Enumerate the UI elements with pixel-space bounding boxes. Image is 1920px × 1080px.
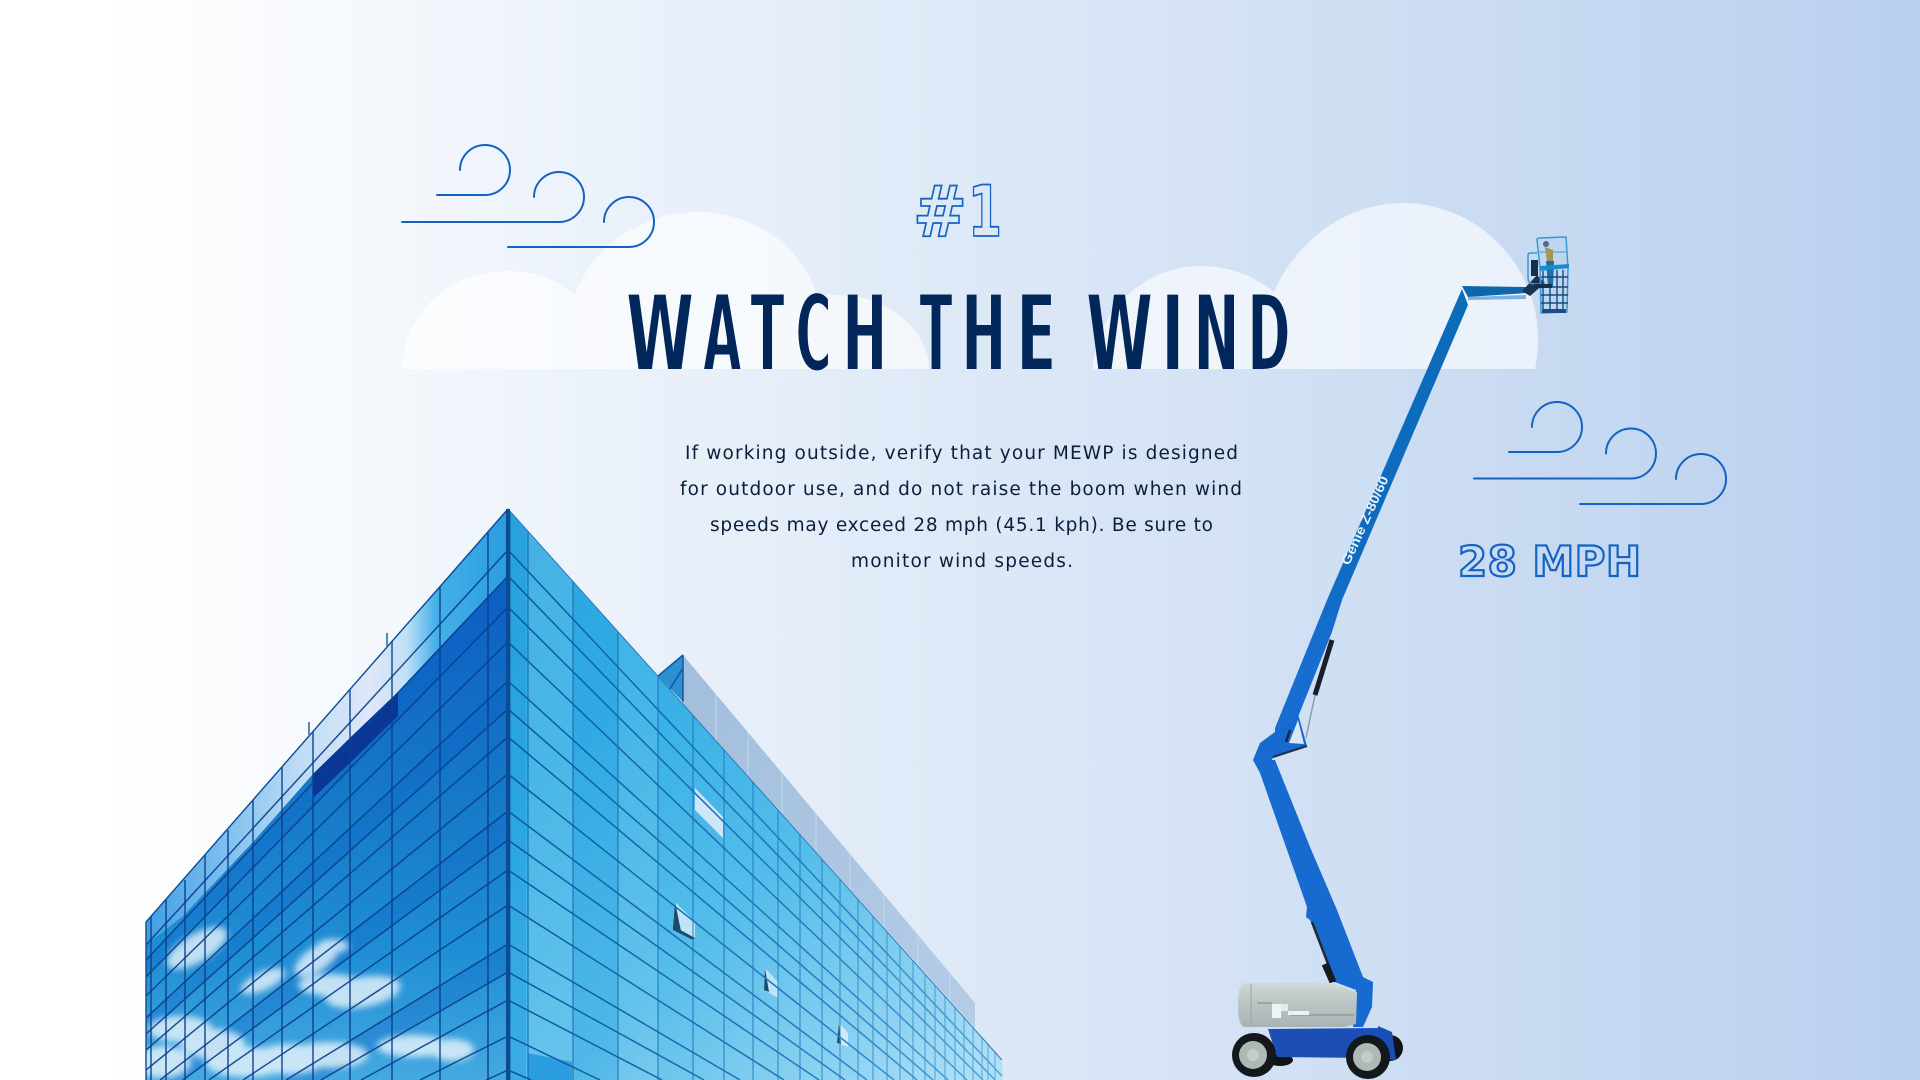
title: E — [1017, 270, 1056, 398]
lift lower boom — [1253, 760, 1373, 1027]
body text — [680, 443, 1242, 572]
icon: wind swirls left — [402, 145, 654, 247]
building corner column — [506, 509, 510, 1080]
body text: speeds may exceed 28 mph (45.1 kph). Be sure to — [710, 515, 1213, 536]
spandrel rows — [146, 814, 506, 1080]
photo: blue boom lift — [1232, 237, 1569, 1079]
lift hydraulic ram — [1306, 640, 1335, 982]
decorative cloud: left — [402, 212, 929, 369]
worker — [1543, 241, 1554, 287]
title: T — [751, 270, 784, 398]
number badge: #1: # — [913, 171, 967, 253]
decorative cloud: right — [1093, 203, 1538, 369]
lift wheel left — [1232, 1033, 1276, 1077]
lift engine cover — [1238, 983, 1357, 1027]
building left face — [135, 509, 508, 1080]
horizontal lines left — [146, 550, 508, 1080]
horizontal lines right — [508, 550, 1002, 1080]
body text: monitor wind speeds. — [851, 551, 1073, 572]
title: N — [1194, 270, 1239, 398]
reflected clouds — [135, 919, 474, 1078]
dark shadow strip — [313, 692, 398, 798]
title: H — [962, 270, 1006, 398]
lift upper boom — [1275, 289, 1468, 736]
title: W — [1086, 270, 1153, 398]
lit roof band — [146, 509, 508, 945]
callout: 28 MPH: 28 MPH — [1458, 537, 1641, 586]
text: D — [1248, 270, 1290, 398]
body text: for outdoor use, and do not raise the boom when wind — [680, 479, 1242, 500]
number badge: #1: 1 — [968, 171, 1002, 253]
title: H — [843, 270, 887, 398]
title: I — [1162, 270, 1184, 398]
photo: glass office building — [135, 509, 1003, 1080]
lift basket and worker — [1528, 237, 1569, 313]
icon: wind swirls right — [1474, 402, 1726, 504]
lift chassis — [1268, 1026, 1396, 1060]
title: C — [796, 270, 831, 398]
lift wheels rear — [1267, 1035, 1403, 1066]
vertical mullions left — [151, 530, 488, 1080]
title: T — [920, 270, 952, 398]
lift jib arm — [1462, 275, 1545, 300]
lift knuckle — [1253, 714, 1307, 775]
building right face — [508, 509, 1003, 1080]
building roof section — [658, 655, 975, 1028]
title: W — [626, 270, 694, 398]
lift boom model text: Genie Z-80/60 — [1338, 474, 1392, 567]
body text: If working outside, verify that your MEWP is designed — [685, 443, 1238, 464]
lift wheel right — [1346, 1035, 1390, 1079]
vertical mullions right — [510, 510, 995, 1080]
title: A — [703, 270, 742, 398]
